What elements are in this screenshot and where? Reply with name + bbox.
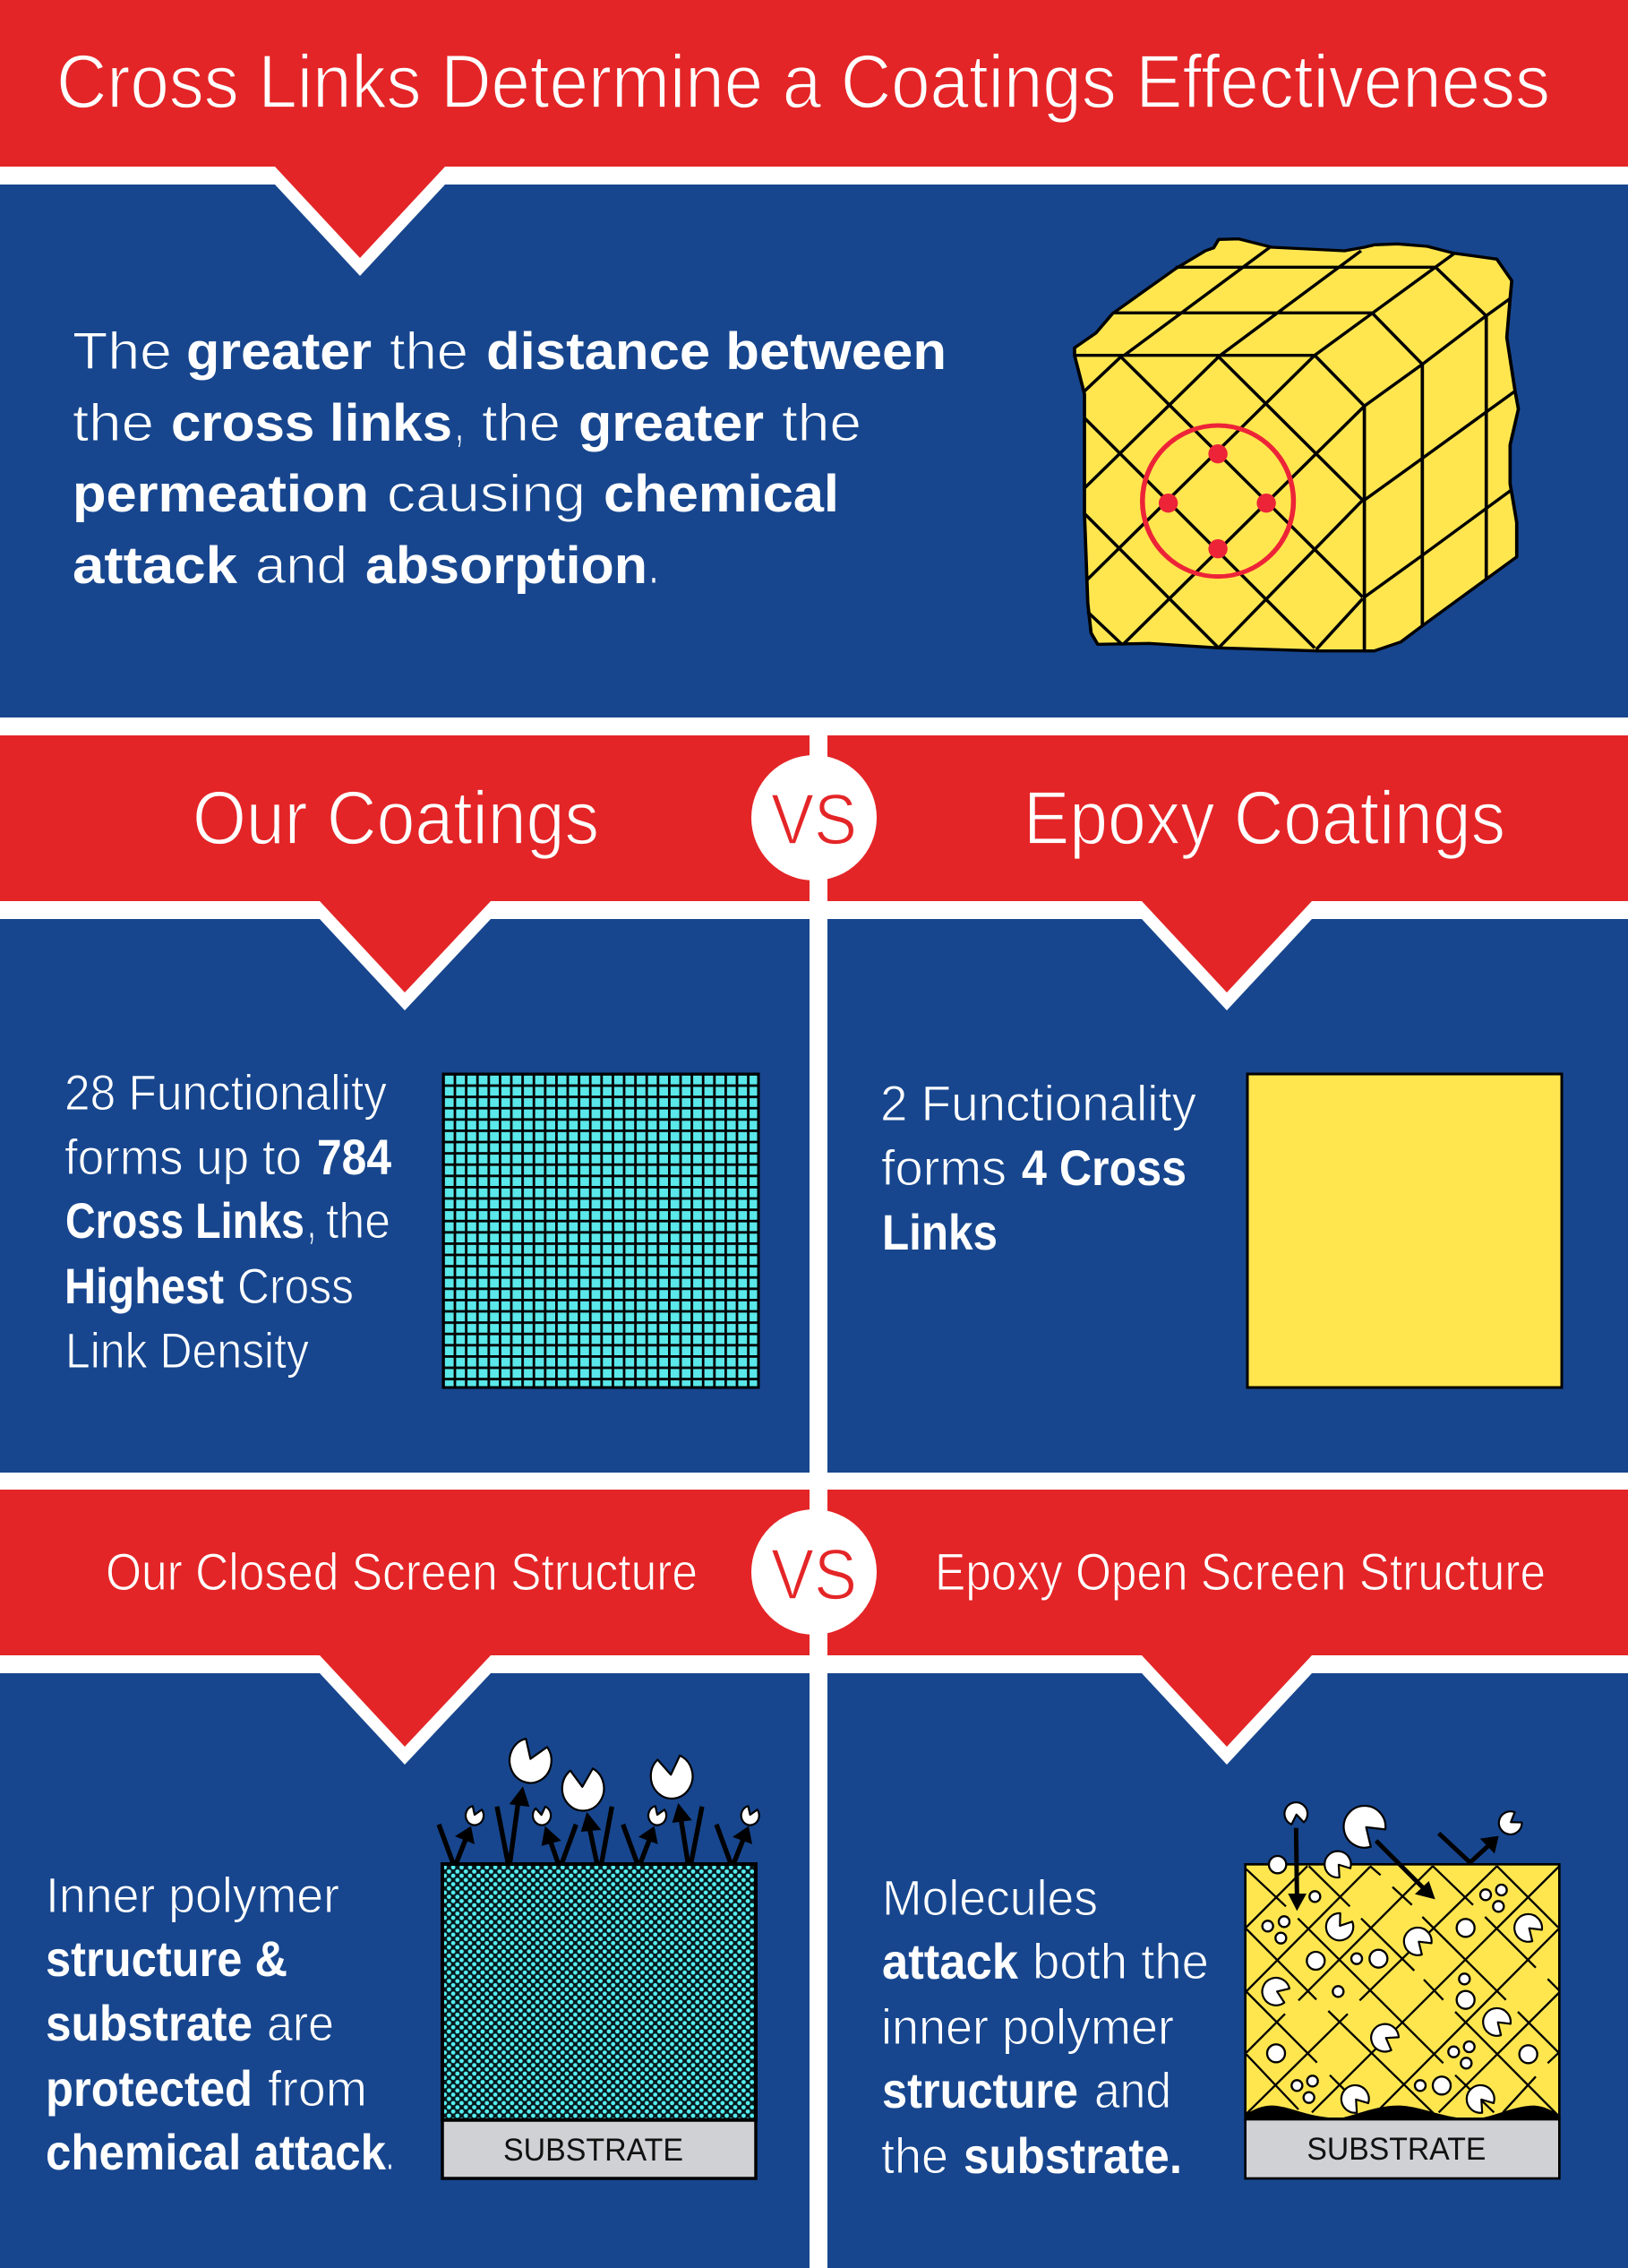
heading: closed screen: Our Closed Screen Structure bbox=[106, 1543, 698, 1602]
text block: epoxy coatings: Links bbox=[882, 1204, 998, 1260]
intro text block: distance between bbox=[486, 322, 947, 381]
illustration: cross-linked cube bbox=[1075, 239, 1519, 651]
intro text block: cross links bbox=[171, 394, 452, 452]
corrosion at substrate surface bbox=[1247, 2106, 1559, 2119]
heading: our coatings: Our Coatings bbox=[193, 776, 599, 860]
intro text block: . bbox=[648, 537, 659, 595]
vertical divider bbox=[810, 717, 827, 2268]
intro text block: , bbox=[455, 394, 464, 452]
text block: closed screen: . bbox=[386, 2124, 394, 2180]
text block: open screen: both the bbox=[1032, 1933, 1209, 1989]
text block: closed screen: Inner polymer bbox=[46, 1867, 339, 1923]
header band: our coatings bbox=[0, 735, 810, 1010]
text block: open screen: attack bbox=[882, 1933, 1019, 1989]
molecules deflected by mesh bbox=[439, 1739, 759, 1863]
substrate layer: SUBSTRATE bbox=[1307, 2132, 1486, 2167]
heading: open screen: Epoxy Open Screen Structure bbox=[935, 1543, 1546, 1602]
text block: closed screen: substrate bbox=[46, 1995, 253, 2051]
text block: our coatings: forms up to bbox=[64, 1129, 302, 1185]
intro text block: greater bbox=[186, 322, 372, 381]
header band: open screen bbox=[827, 1490, 1628, 1765]
text block: closed screen: structure & bbox=[46, 1930, 287, 1987]
intro text block: The bbox=[73, 322, 172, 381]
icon: red target circle with cross-link dots bbox=[1143, 425, 1293, 577]
panel: screen structure comparison bbox=[0, 1490, 1628, 2268]
substrate layer bbox=[1246, 2119, 1559, 2178]
text block: epoxy coatings: 4 Cross bbox=[1022, 1139, 1187, 1196]
diagram: closed screen structure bbox=[439, 1739, 759, 2178]
intro text block: permeation bbox=[73, 465, 369, 523]
substrate layer bbox=[442, 2120, 756, 2178]
attack arrows bbox=[1288, 1828, 1499, 1911]
badge: VS bottom bbox=[751, 1509, 877, 1635]
intro text block: the bbox=[782, 394, 861, 452]
header band: epoxy coatings bbox=[827, 735, 1628, 1010]
text block: open screen: the bbox=[881, 2127, 948, 2184]
chart: dense cross link grid bbox=[443, 1074, 758, 1387]
intro text block: the bbox=[390, 322, 468, 381]
intro text block: causing bbox=[387, 465, 586, 523]
text block: our coatings: Highest bbox=[64, 1258, 224, 1314]
intro text block: the bbox=[482, 394, 561, 452]
coating outline bbox=[1246, 1864, 1559, 2119]
chart: sparse yellow square bbox=[1247, 1074, 1562, 1387]
text block: our coatings: 784 bbox=[317, 1129, 391, 1185]
text block: our coatings: Link Density bbox=[65, 1322, 309, 1379]
coating mesh bbox=[442, 1864, 756, 2120]
panel: coatings comparison bbox=[0, 735, 1628, 1473]
panel: intro bbox=[0, 0, 1628, 717]
text block: closed screen: protected bbox=[46, 2060, 253, 2117]
molecules inside structure bbox=[1263, 1856, 1538, 2103]
intro text block: greater bbox=[578, 394, 764, 452]
badge: VS bottom: VS bbox=[771, 1534, 857, 1614]
substrate layer: SUBSTRATE bbox=[503, 2133, 683, 2168]
intro text block: the bbox=[73, 394, 154, 452]
intro text block: and bbox=[255, 537, 347, 595]
text block: our coatings: 28 Functionality bbox=[64, 1064, 387, 1121]
text block: epoxy coatings: 2 Functionality bbox=[880, 1075, 1196, 1131]
text block: our coatings: Cross Links bbox=[65, 1192, 304, 1249]
text block: closed screen: chemical attack bbox=[46, 2124, 387, 2180]
header band: title bbox=[0, 0, 1628, 276]
header band: closed screen bbox=[0, 1490, 810, 1765]
badge: VS top bbox=[751, 755, 877, 881]
text block: open screen: and bbox=[1094, 2062, 1171, 2118]
text block: our coatings: the bbox=[326, 1192, 390, 1249]
text block: open screen: inner polymer bbox=[881, 1998, 1174, 2055]
text block: open screen: Molecules bbox=[882, 1869, 1098, 1926]
diagram: open screen structure bbox=[1246, 1798, 1559, 2178]
text block: epoxy coatings: forms bbox=[881, 1139, 1007, 1196]
title: Cross Links Determine a Coatings Effectiveness bbox=[56, 39, 1550, 124]
intro text block: chemical bbox=[604, 465, 839, 523]
badge: VS top: VS bbox=[771, 779, 857, 859]
intro text block: absorption bbox=[365, 537, 647, 595]
text block: open screen: structure bbox=[882, 2062, 1078, 2118]
text block: our coatings: , bbox=[307, 1192, 316, 1249]
text block: open screen: substrate. bbox=[964, 2127, 1182, 2184]
text block: our coatings: Cross bbox=[237, 1258, 354, 1314]
heading: epoxy coatings: Epoxy Coatings bbox=[1024, 776, 1505, 860]
intro text block: attack bbox=[73, 537, 238, 595]
text block: closed screen: from bbox=[268, 2060, 367, 2117]
text block: closed screen: are bbox=[267, 1995, 334, 2051]
